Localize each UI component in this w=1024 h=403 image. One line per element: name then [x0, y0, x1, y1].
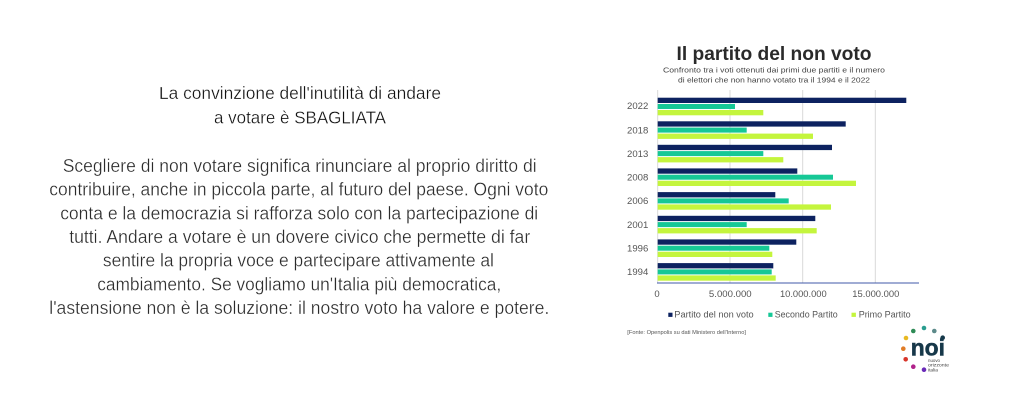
chart subtitle: Confronto tra i voti ottenuti dai primi due partiti e il numero [663, 66, 885, 74]
logo dots [901, 326, 945, 372]
text block: body paragraph: Scegliere di non votare significa rinunciare al proprio diritto di [63, 156, 537, 176]
year labels [627, 101, 648, 278]
x axis labels: 10.000.000 [780, 289, 827, 300]
chart title: Il partito del non voto [676, 44, 872, 65]
bars: 2022 [658, 98, 906, 115]
x axis labels: 15.000.000 [852, 289, 899, 300]
year labels: 2001 [627, 220, 648, 231]
bar chart [627, 90, 919, 300]
bars: 2013 [658, 145, 832, 162]
text block: body paragraph: sentire la propria voce e partecipare attivamente al [103, 251, 494, 271]
chart subtitle: di elettori che non hanno votato tra il 1994 e il 2022 [678, 76, 870, 84]
legend: Primo Partito [859, 310, 911, 320]
chart subtitle [663, 66, 885, 84]
bars: 1996 [658, 239, 796, 257]
logo word: noi [911, 334, 945, 360]
bars: 2008 [658, 168, 856, 186]
text block: body paragraph: tutti. Andare a votare è un dovere civico che permette di far [69, 227, 530, 247]
year labels: 2013 [627, 149, 648, 160]
logo tagline: italia [928, 367, 938, 372]
bars: 2006 [658, 192, 831, 210]
logo: noi [901, 326, 950, 372]
year labels: 1996 [627, 244, 648, 254]
logo tagline [928, 358, 950, 372]
x axis labels: 0 [654, 289, 660, 300]
legend [668, 310, 911, 320]
year labels: 2006 [627, 196, 648, 207]
text block: body paragraph: contribuire, anche in piccola parte, al futuro del paese. Ogni voto [49, 180, 548, 200]
year labels: 1994 [627, 267, 648, 278]
bars: 1994 [658, 263, 776, 281]
heading: main statement: a votare è SBAGLIATA [214, 108, 386, 128]
text block: body paragraph: conta e la democrazia si rafforza solo con la partecipazione di [60, 203, 538, 223]
heading: main statement: La convinzione dell'inutilità di andare [159, 83, 441, 103]
text block: body paragraph: l'astensione non è la soluzione: il nostro voto ha valore e potere. [49, 298, 549, 318]
x axis labels [654, 289, 899, 300]
legend: Partito del non voto [674, 310, 754, 320]
x axis labels: 5.000.000 [709, 289, 752, 300]
year labels: 2008 [627, 172, 648, 184]
text block: body paragraph: cambiamento. Se vogliamo un'Italia più democratica, [97, 274, 501, 294]
bars: 2001 [658, 216, 817, 233]
year labels: 2022 [627, 101, 648, 112]
source note: [Fonte: Openpolis su dati Ministero dell'Interno] [627, 330, 747, 336]
logo tagline: nuovo [928, 358, 940, 363]
bars: 2018 [658, 121, 846, 139]
legend: Secondo Partito [775, 310, 838, 320]
text block: body paragraph [49, 156, 549, 318]
logo tagline: orizzonte [928, 363, 950, 368]
year labels: 2018 [627, 126, 648, 136]
heading: main statement [159, 83, 441, 128]
